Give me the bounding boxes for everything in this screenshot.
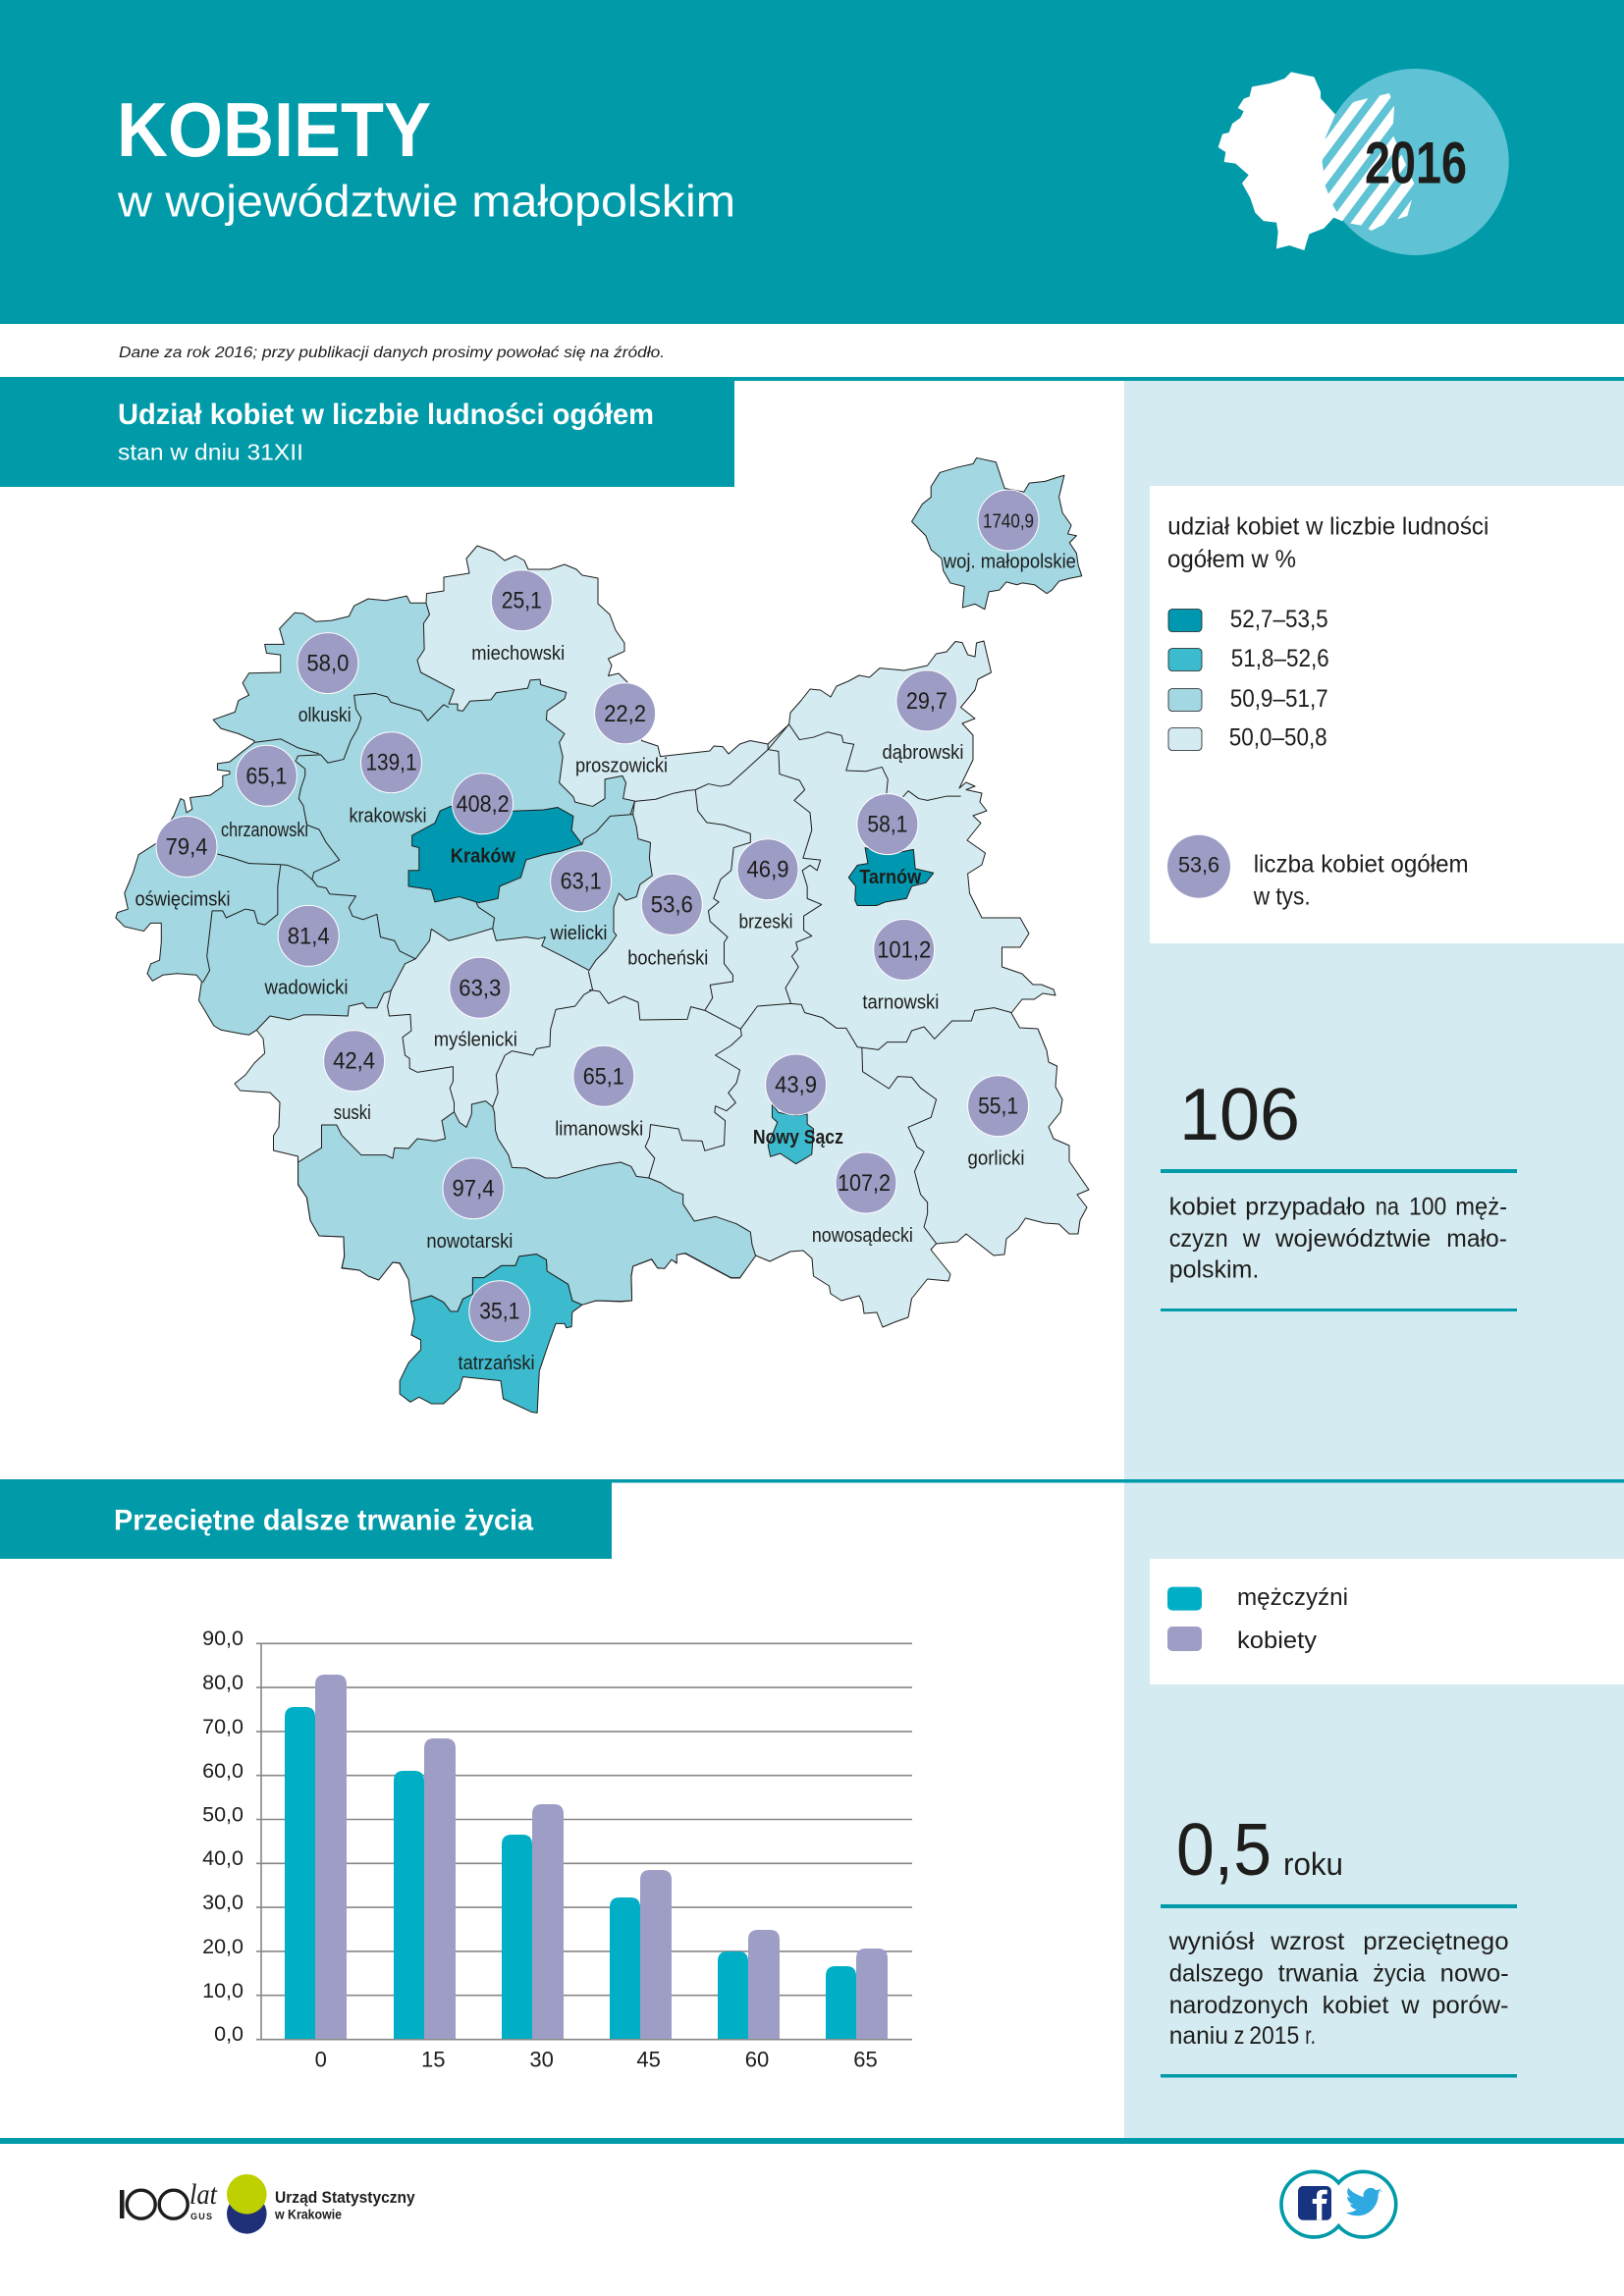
legend item: 51,8–52,6: [1168, 645, 1329, 672]
chart legend: [1150, 1559, 1624, 1684]
district: wielicki: 63,1: [561, 869, 602, 895]
legend item: 52,7–53,5: [1168, 606, 1328, 633]
district fill: tatrzański: [400, 1255, 582, 1413]
map legend: [1150, 486, 1624, 943]
district: woj. małopolskie: woj. małopolskie: [943, 552, 1076, 573]
district: Kraków: Kraków: [451, 845, 515, 867]
section heading: share of women: stan w dniu 31XII: [118, 440, 303, 465]
city: Nowy Sącz: [768, 1104, 814, 1164]
callout: 0,5 year increase: z: [1234, 2022, 1244, 2050]
section heading: share of women: [0, 377, 734, 487]
district: krakowski: krakowski: [350, 806, 426, 828]
bars: men: [285, 1707, 856, 2039]
y axis labels: 90,0: [202, 1627, 244, 1650]
district: nowosądecki: [812, 1152, 913, 1247]
district: miechowski: 25,1: [502, 588, 542, 614]
x axis labels: 60: [745, 2048, 769, 2072]
district: proszowicki: proszowicki: [575, 756, 668, 777]
callout: 0,5 year increase: [1161, 1808, 1517, 2077]
city: Kraków: [408, 806, 582, 903]
district: Nowy Sącz: 43,9: [775, 1072, 817, 1098]
district: tarnowski: [862, 919, 939, 1014]
mid-tone districts: olkuski, krakowski, chrzanowski, oświęcimski, wadowicki, wielicki: [116, 596, 652, 1035]
district: suski: [324, 1031, 385, 1124]
header banner: [0, 0, 1624, 324]
callout: 0,5 year increase: życia: [1373, 1960, 1426, 1988]
district: dąbrowski: 29,7: [906, 688, 947, 715]
district: myślenicki: myślenicki: [434, 1030, 517, 1051]
district: olkuski: olkuski: [298, 705, 352, 726]
district: Tarnów: [857, 794, 922, 888]
district: Kraków: 408,2: [457, 791, 510, 818]
section rule: [0, 377, 1624, 381]
district: wadowicki: 81,4: [288, 923, 330, 949]
district fill: nowotarski: [298, 1101, 756, 1311]
district: chrzanowski: chrzanowski: [221, 820, 308, 841]
district: bocheński: [627, 874, 708, 970]
bar chart: life expectancy by age: [202, 1627, 912, 2072]
callout: 0,5 year increase: przeciętnego: [1363, 1928, 1509, 1955]
district: tarnowski: 101,2: [877, 936, 931, 964]
chart legend: mężczyźni: [1237, 1584, 1348, 1611]
district: Nowy Sącz: [753, 1054, 843, 1148]
district: woj. małopolskie: [943, 490, 1076, 573]
callout: 0,5 year increase: nowo-: [1440, 1960, 1509, 1988]
y axis labels: 80,0: [202, 1671, 244, 1694]
district: nowotarski: nowotarski: [426, 1231, 513, 1253]
logo: 100 lat GUS: [120, 2178, 218, 2221]
inset: whole voivodeship: [912, 457, 1082, 610]
callout: 106 women per 100 men: czyzn: [1169, 1225, 1228, 1253]
district: gorlicki: 55,1: [978, 1094, 1018, 1120]
district: oświęcimski: 79,4: [165, 834, 208, 860]
district: dąbrowski: dąbrowski: [882, 742, 964, 764]
callout: 0,5 year increase: dalszego: [1169, 1960, 1264, 1988]
callout: 106 women per 100 men: męż-: [1455, 1193, 1507, 1220]
district: limanowski: 65,1: [583, 1063, 624, 1090]
callout: 106 women per 100 men: [1161, 1073, 1517, 1311]
district: wadowicki: wadowicki: [264, 977, 348, 998]
district: nowotarski: 97,4: [452, 1176, 495, 1202]
district: suski: suski: [334, 1102, 371, 1124]
district: bocheński: bocheński: [627, 948, 708, 970]
callout: 0,5 year increase: roku: [1283, 1846, 1343, 1882]
icon: twitter: [1346, 2188, 1381, 2216]
logo: 100 lat GUS: GUS: [190, 2212, 212, 2221]
legend item: circle meaning: liczba kobiet ogółem: [1254, 851, 1469, 879]
district: oświęcimski: [135, 817, 230, 910]
district: wadowicki: [264, 905, 348, 998]
legend item: 51,8–52,6: 51,8–52,6: [1231, 645, 1329, 672]
callout: 0,5 year increase: 0,5: [1176, 1808, 1272, 1891]
callout: 0,5 year increase: 2015: [1249, 2022, 1299, 2050]
callout: 0,5 year increase: wyniósł: [1168, 1928, 1255, 1955]
logo: Urząd Statystyczny w Krakowie: Urząd Statystyczny: [275, 2188, 415, 2207]
y axis labels: 20,0: [202, 1935, 244, 1958]
icon: region silhouette with 2016: [1218, 69, 1509, 255]
district: Kraków: [451, 774, 515, 867]
map legend: udział kobiet w liczbie ludności: [1167, 512, 1489, 540]
section heading: share of women: Udział kobiet w liczbie ludności ogółem: [118, 399, 654, 431]
logo: 100 lat GUS: lat: [189, 2178, 218, 2211]
district: proszowicki: [575, 683, 668, 777]
district: nowosądecki: 107,2: [838, 1170, 891, 1197]
district: brzeski: 46,9: [746, 857, 789, 883]
y axis labels: [202, 1627, 244, 2046]
district: chrzanowski: [221, 745, 308, 841]
x axis labels: 45: [636, 2048, 661, 2072]
x axis labels: 0: [315, 2048, 327, 2072]
callout: 0,5 year increase: wzrost: [1270, 1928, 1344, 1955]
y axis labels: 30,0: [202, 1891, 244, 1914]
x axis labels: 30: [529, 2048, 554, 2072]
logo: Urząd Statystyczny w Krakowie: [227, 2174, 415, 2234]
district: gorlicki: [968, 1076, 1029, 1170]
x axis labels: 65: [853, 2048, 878, 2072]
district: Tarnów: Tarnów: [859, 867, 922, 888]
district: miechowski: [471, 570, 565, 665]
district: chrzanowski: 65,1: [245, 763, 287, 789]
district: gorlicki: gorlicki: [968, 1148, 1025, 1170]
district: Nowy Sącz: Nowy Sącz: [753, 1127, 843, 1148]
section rule: [0, 1479, 1624, 1482]
y axis labels: 10,0: [202, 1979, 244, 2002]
y axis labels: 60,0: [202, 1759, 244, 1783]
city: Tarnów: [848, 848, 934, 905]
district: Tarnów: 58,1: [867, 812, 907, 838]
base light districts: [235, 546, 1089, 1327]
district: tatrzański: 35,1: [479, 1299, 519, 1325]
bars: women: [315, 1675, 888, 2039]
callout: 106 women per 100 men: 100: [1409, 1193, 1446, 1220]
legend item: 50,0–50,8: [1168, 723, 1327, 751]
logo: Urząd Statystyczny w Krakowie: w Krakowie: [274, 2207, 342, 2222]
district: myślenicki: 63,3: [459, 975, 501, 1001]
legend item: circle meaning: [1167, 835, 1469, 911]
y axis labels: 0,0: [214, 2022, 244, 2046]
x axis labels: [315, 2048, 878, 2072]
callout: 106 women per 100 men: w: [1242, 1225, 1261, 1253]
icon: facebook: [1298, 2186, 1331, 2220]
district: wielicki: [550, 851, 612, 944]
district: woj. małopolskie: 1740,9: [983, 510, 1034, 532]
icon: region silhouette with 2016: 2016: [1365, 131, 1467, 196]
callout: 106 women per 100 men: polskim.: [1169, 1256, 1259, 1284]
y axis labels: 50,0: [202, 1802, 244, 1826]
legend item: 52,7–53,5: 52,7–53,5: [1230, 606, 1328, 633]
district: nowotarski: [426, 1158, 513, 1253]
y axis labels: 40,0: [202, 1846, 244, 1870]
district: tatrzański: [458, 1281, 534, 1374]
right side panel background: [1124, 381, 1624, 2138]
district: brzeski: brzeski: [738, 911, 793, 933]
callout: 0,5 year increase: kobiet: [1323, 1992, 1388, 2019]
district: tatrzański: tatrzański: [458, 1353, 534, 1374]
callout: 106 women per 100 men: na: [1376, 1193, 1399, 1220]
district: krakowski: 139,1: [365, 750, 416, 776]
callout: 0,5 year increase: trwania: [1278, 1960, 1358, 1988]
subtitle: w województwie małopolskim: [117, 177, 735, 227]
district: dąbrowski: [882, 670, 964, 764]
section heading: life expectancy: Przeciętne dalsze trwanie życia: [114, 1504, 534, 1537]
callout: 0,5 year increase: narodzonych: [1169, 1992, 1309, 2019]
district: miechowski: miechowski: [471, 643, 565, 665]
district: brzeski: [737, 839, 798, 933]
district: krakowski: [350, 732, 426, 828]
source note: Dane za rok 2016; przy publikacji danych prosimy powołać się na źródło.: [119, 345, 665, 361]
legend item: circle meaning: w tys.: [1253, 883, 1311, 911]
x axis labels: 15: [421, 2048, 445, 2072]
district: olkuski: [298, 633, 358, 726]
district: wielicki: wielicki: [550, 923, 607, 944]
district: myślenicki: [434, 957, 517, 1051]
callout: 106 women per 100 men: przypadało: [1245, 1193, 1366, 1220]
callout: 0,5 year increase: porów-: [1432, 1992, 1509, 2019]
icons: social media: [1281, 2171, 1396, 2237]
district: limanowski: limanowski: [555, 1119, 643, 1141]
district: tarnowski: tarnowski: [862, 992, 939, 1014]
map: powiats of Małopolska: [116, 457, 1089, 1413]
callout: 106 women per 100 men: mało-: [1446, 1225, 1507, 1253]
district: nowosądecki: nowosądecki: [812, 1225, 913, 1247]
callout: 106 women per 100 men: województwie: [1274, 1225, 1431, 1253]
map legend: ogółem w %: [1167, 546, 1296, 573]
title: KOBIETY: [117, 86, 431, 173]
section heading: life expectancy: [0, 1479, 612, 1559]
callout: 106 women per 100 men: 106: [1179, 1073, 1300, 1155]
legend item: circle meaning: 53,6: [1178, 853, 1219, 878]
callout: 0,5 year increase: r.: [1305, 2022, 1316, 2050]
y axis labels: 70,0: [202, 1715, 244, 1738]
callout: 0,5 year increase: naniu: [1169, 2022, 1228, 2050]
district: suski: 42,4: [333, 1048, 375, 1075]
chart legend: kobiety: [1237, 1628, 1317, 1654]
legend item: 50,0–50,8: 50,0–50,8: [1229, 723, 1327, 751]
district: proszowicki: 22,2: [604, 701, 646, 727]
district: oświęcimski: oświęcimski: [135, 888, 230, 910]
district: limanowski: [555, 1045, 643, 1141]
callout: 106 women per 100 men: kobiet: [1169, 1193, 1236, 1220]
legend item: 50,9–51,7: 50,9–51,7: [1230, 685, 1328, 713]
district: olkuski: 58,0: [306, 651, 349, 677]
callout: 0,5 year increase: w: [1400, 1992, 1421, 2019]
footer rule: [0, 2138, 1624, 2144]
district: bocheński: 53,6: [651, 891, 693, 918]
legend item: 50,9–51,7: [1168, 685, 1328, 713]
